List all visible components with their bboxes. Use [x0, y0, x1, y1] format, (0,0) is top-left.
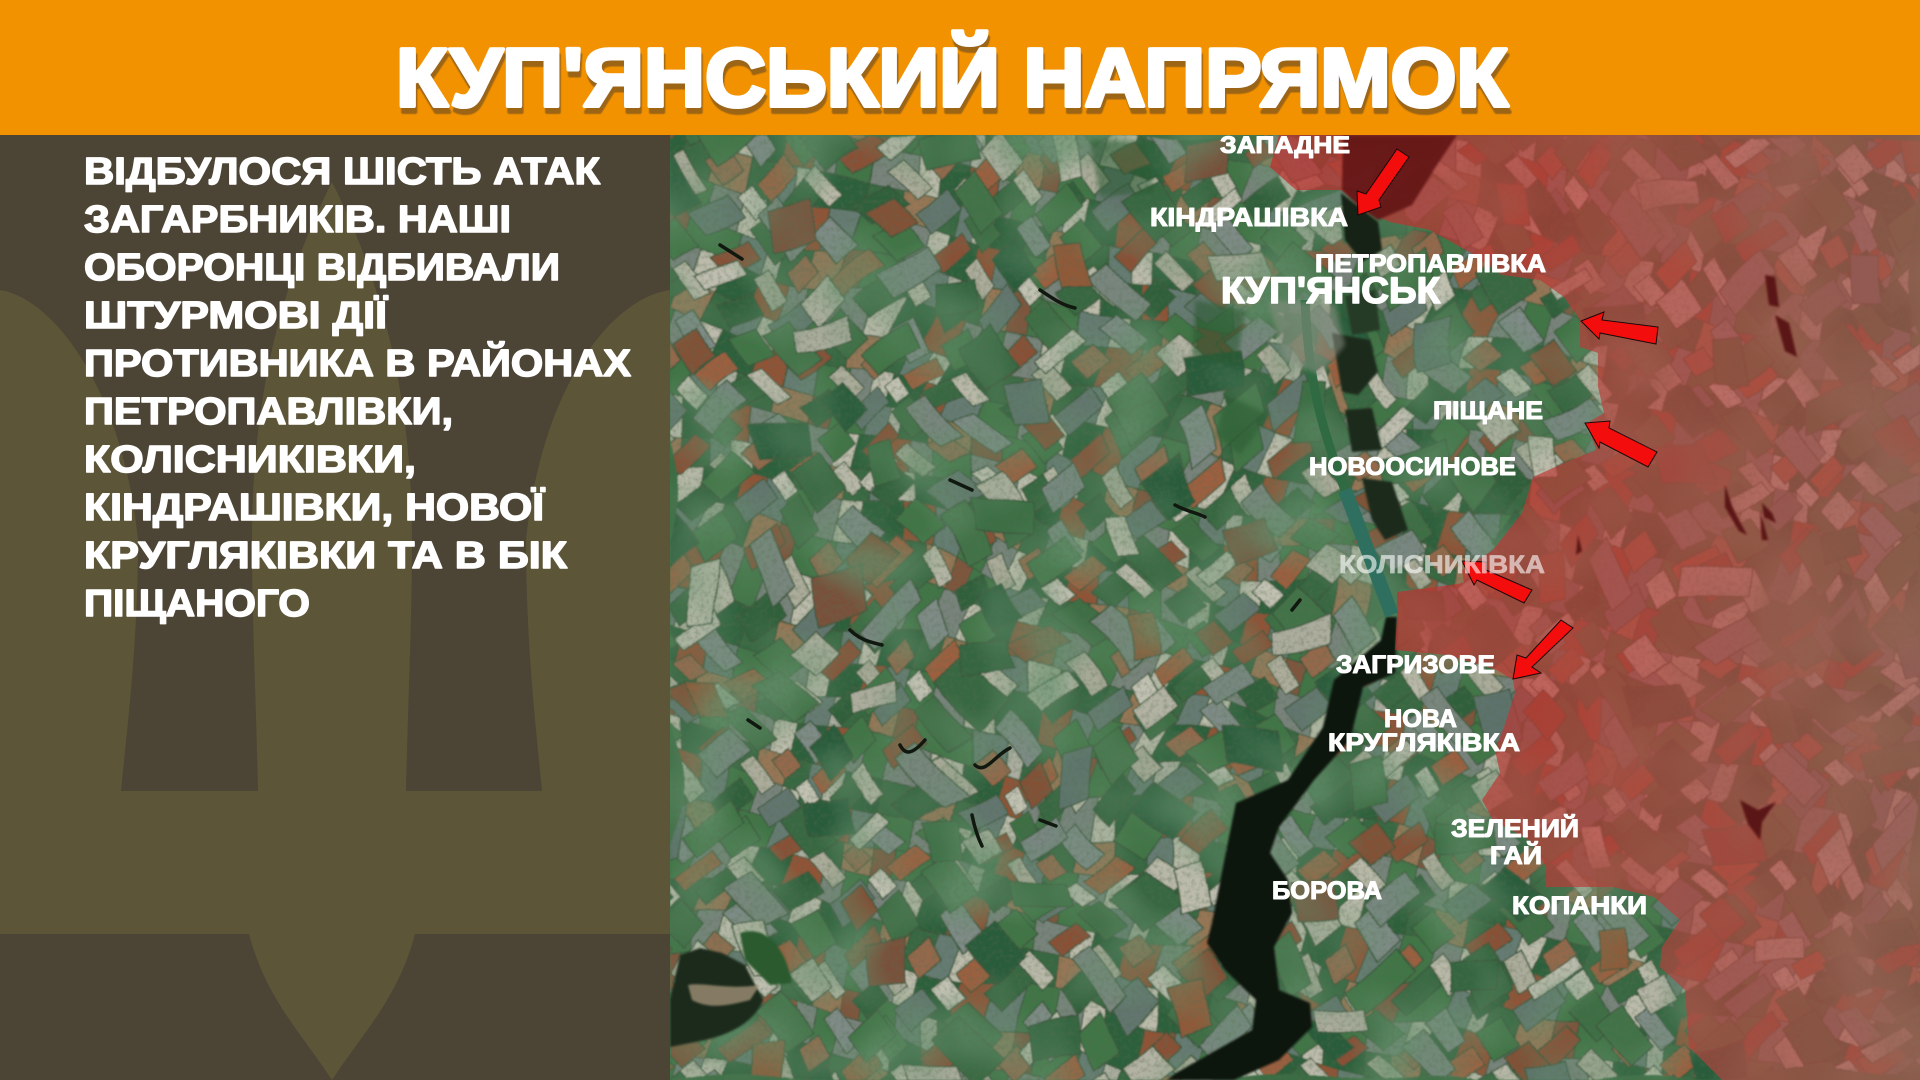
label: Zelenyi Hai [1451, 813, 1579, 870]
label: Nova Kruhliakivka: НОВА [1384, 705, 1457, 733]
panel body text: ПІЩАНОГО [84, 583, 310, 625]
panel body text: ЗАГАРБНИКІВ. НАШІ [84, 199, 511, 241]
left text panel [0, 135, 670, 1080]
label: Zahryzove: ЗАГРИЗОВЕ [1336, 651, 1495, 679]
arrow: attack towards Pishchane [1585, 421, 1657, 467]
reservoir water [1167, 617, 1397, 1080]
map place labels [1150, 132, 1647, 920]
label: Kupiansk: КУП'ЯНСЬК [1221, 270, 1440, 311]
panel body text: ОБОРОНЦІ ВІДБИВАЛИ [84, 247, 560, 289]
label: Novoosynove: НОВООСИНОВЕ [1309, 453, 1516, 481]
label: Kindrashivka: КІНДРАШІВКА [1150, 202, 1348, 232]
panel body text: ШТУРМОВІ ДІЇ [84, 294, 389, 337]
ponds in occupied territory [1576, 275, 1797, 840]
label: Zelenyi Hai: ГАЙ [1490, 840, 1542, 870]
orange header bar [0, 0, 1920, 135]
label: Nova Kruhliakivka [1328, 705, 1520, 757]
label: Nova Kruhliakivka: КРУГЛЯКІВКА [1328, 729, 1520, 757]
label: Zelenyi Hai: ЗЕЛЕНИЙ [1451, 813, 1579, 843]
panel body text: ПЕТРОПАВЛІВКИ, [84, 391, 453, 433]
label: Zapadne: ЗАПАДНЕ [1220, 132, 1350, 159]
panel body text: ВІДБУЛОСЯ ШІСТЬ АТАК [84, 151, 601, 193]
dark forest strips [1341, 193, 1382, 262]
river floodplain and reservoir [1167, 193, 1408, 1080]
label: Borova: БОРОВА [1272, 877, 1382, 905]
label: Pishchane: ПІЩАНЕ [1433, 397, 1543, 425]
label: Kolisnykivka: КОЛІСНИКІВКА [1339, 551, 1545, 579]
arrow: attack towards Zahryzove [1513, 620, 1573, 679]
forest patches [670, 140, 1270, 1047]
city of Kupiansk built-up area [1268, 300, 1345, 375]
arrow: Western attack near Kindrashivka [1357, 149, 1409, 215]
arrow: attack towards Petropavlivka [1581, 312, 1658, 344]
title: КУП'ЯНСЬКИЙ НАПРЯМОК [396, 30, 1508, 124]
dark occupied forest [1342, 135, 1457, 220]
farmland field mosaic [670, 135, 1920, 1080]
gully lines [720, 245, 1300, 846]
upper river channel [1305, 300, 1345, 490]
trident emblem watermark [0, 182, 670, 1080]
arrow: attack towards Kolisnykivka [1462, 561, 1532, 603]
occupied territory overlay [1270, 135, 1920, 1080]
label: Petropavlivka: ПЕТРОПАВЛІВКА [1315, 250, 1546, 278]
satellite map [670, 135, 1920, 1080]
panel body text: КОЛІСНИКІВКИ, [84, 439, 416, 481]
panel body text: КРУГЛЯКІВКИ ТА В БІК [84, 535, 568, 577]
label: Kopanky: КОПАНКИ [1512, 892, 1647, 920]
panel body text: КІНДРАШІВКИ, НОВОЇ [84, 486, 546, 529]
panel body text: ПРОТИВНИКА В РАЙОНАХ [84, 340, 632, 385]
panel body text [84, 151, 632, 625]
